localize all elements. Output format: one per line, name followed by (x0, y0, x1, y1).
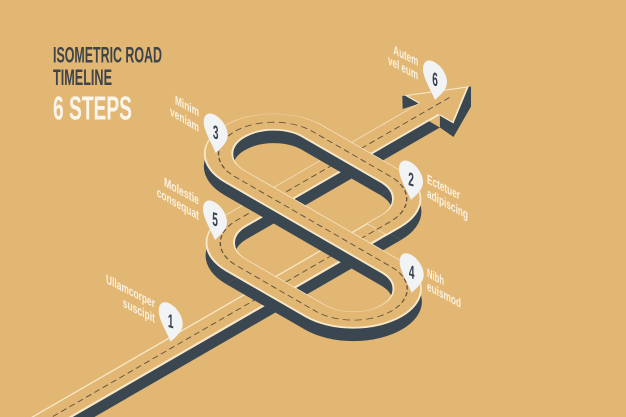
road surface: straight approaches and arrow (0, 74, 556, 417)
title: TIMELINE (53, 65, 112, 90)
label: step 6: vel eum (388, 52, 418, 83)
label: step 1: suscipit (123, 294, 155, 326)
title: ISOMETRIC ROAD (53, 42, 162, 68)
label: step 5: Molestie (164, 174, 199, 208)
label: step 4 (427, 266, 461, 311)
isometric road (0, 74, 556, 417)
label: step 1 (106, 271, 155, 326)
label: step 6: Autem (393, 43, 418, 69)
loop shadow (120, 122, 507, 346)
label: step 1: Ullamcorper (106, 271, 155, 311)
figure-eight loop surface (119, 108, 508, 333)
label: step 2: adipiscing (427, 185, 468, 222)
step 5 marker (203, 200, 227, 240)
label: step 3: Minim (175, 92, 199, 120)
label: step 4: euismod (427, 278, 461, 311)
arrow shadow (402, 86, 471, 137)
label: step 6 (388, 43, 418, 83)
label: step 2 (427, 171, 468, 222)
label: step 5: consequat (157, 184, 199, 223)
step 4 marker: 4 (409, 261, 415, 284)
title: 6 STEPS (53, 90, 132, 126)
step 2 marker (399, 160, 423, 200)
step 6 marker (423, 60, 447, 100)
step 1 marker (159, 302, 183, 342)
label: step 3 (170, 92, 199, 135)
road shadow: straight approaches (0, 122, 518, 417)
label: step 2: Ectetuer (427, 171, 460, 203)
step 6 marker: 6 (432, 68, 438, 92)
label: step 3: veniam (170, 103, 199, 135)
step 4 marker (400, 253, 424, 293)
title (53, 42, 162, 126)
step 2 marker: 2 (408, 168, 414, 192)
step 5 marker: 5 (212, 208, 218, 232)
label: step 5 (157, 174, 199, 223)
step 1 marker: 1 (168, 310, 174, 333)
label: step 4: Nibh (427, 266, 444, 288)
step 3 marker: 3 (213, 121, 219, 145)
step 3 marker (204, 114, 228, 153)
